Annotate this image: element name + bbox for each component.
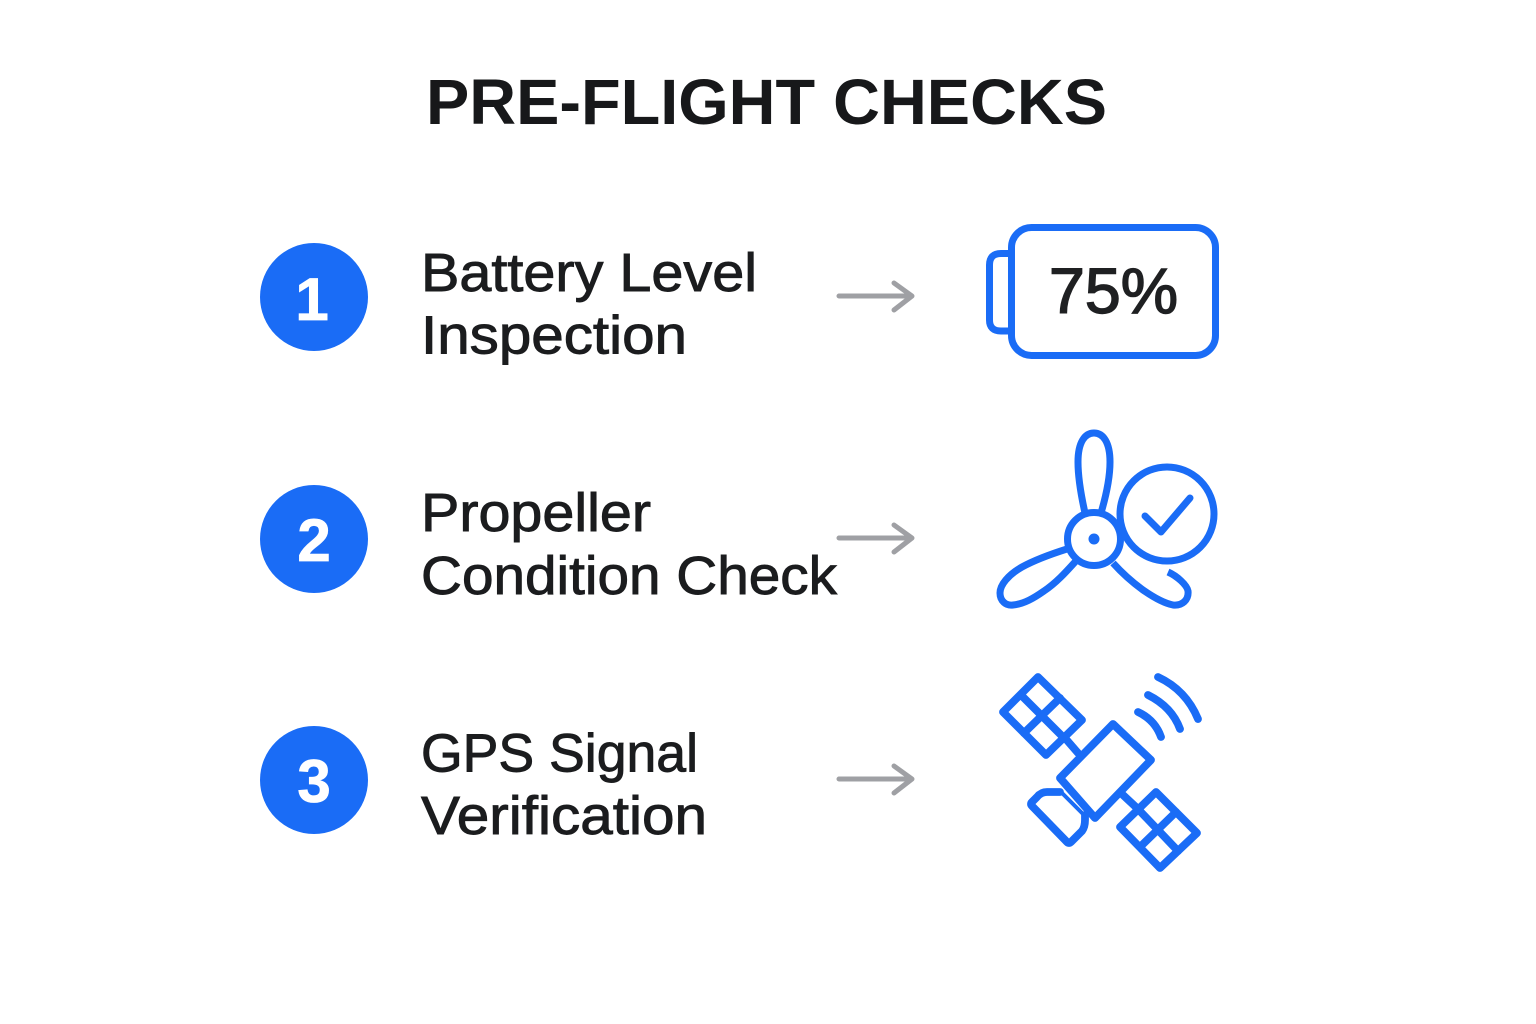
title: PRE-FLIGHT CHECKS — [426, 66, 1107, 138]
number badge 3 — [260, 726, 368, 834]
step 3: gps signal verification — [260, 677, 1198, 868]
label: gps signal verification — [421, 724, 707, 846]
number badge 2: 2 — [297, 507, 331, 574]
arrow 3 — [839, 766, 912, 793]
label: gps signal verification: GPS Signal — [421, 724, 698, 784]
label: battery level inspection — [421, 243, 757, 366]
label: propeller condition check: Propeller — [421, 483, 651, 543]
arrow 1 — [839, 283, 912, 310]
label: propeller condition check — [421, 483, 838, 606]
step 1: battery level inspection — [260, 228, 1216, 366]
step 2: propeller condition check — [260, 433, 1214, 606]
icon: propeller with check — [1000, 433, 1214, 605]
icon: satellite — [1003, 677, 1198, 868]
label: battery level inspection: Inspection — [421, 306, 687, 366]
label: propeller condition check: Condition Check — [421, 546, 838, 606]
number badge 2 — [260, 485, 368, 593]
icon: battery 75%: 75% — [1049, 255, 1178, 327]
icon: battery 75% — [990, 228, 1216, 356]
label: gps signal verification: Verification — [421, 786, 707, 846]
number badge 1 — [260, 243, 368, 351]
label: battery level inspection: Battery Level — [421, 243, 757, 303]
number badge 3: 3 — [297, 748, 331, 815]
arrow 2 — [839, 525, 912, 552]
number badge 1: 1 — [295, 266, 329, 333]
